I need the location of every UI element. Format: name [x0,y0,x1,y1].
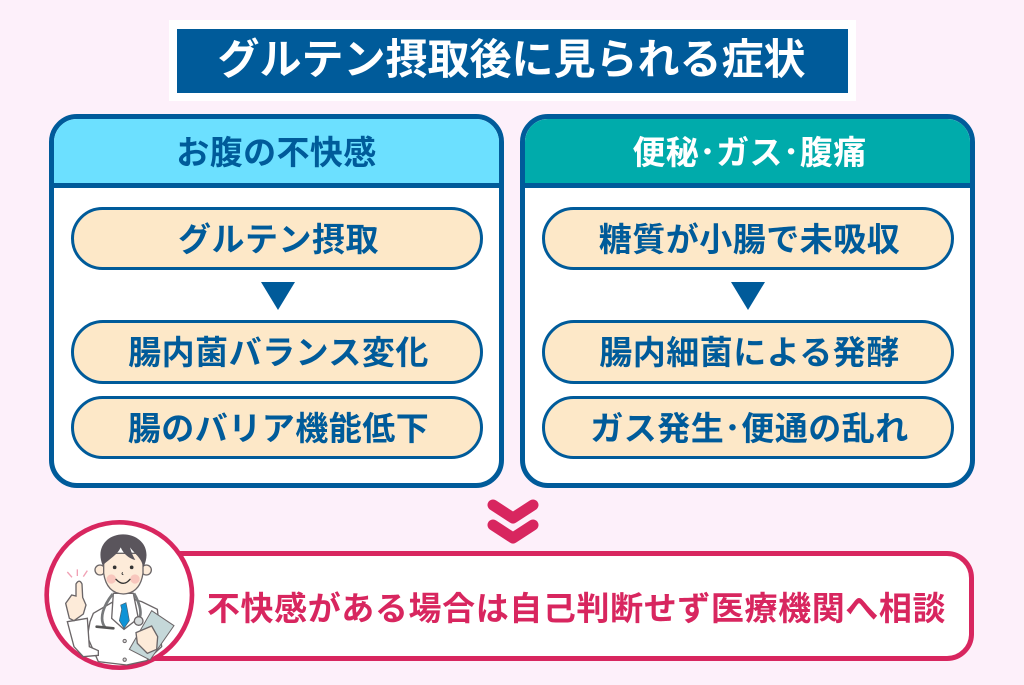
panel heading: stomach discomfort: お腹の不快感 [176,134,377,171]
step: gas and bowel disturbance [542,396,954,459]
callout text: 不快感がある場合は自己判断せず医療機関へ相談 [207,590,946,627]
step: gluten intake: グルテン摂取 [178,221,379,258]
arrow: down left [261,282,295,310]
stethoscope [102,593,140,627]
doctor coat [87,597,162,665]
step: fermentation [542,320,954,384]
arrow: down right [731,282,765,310]
panel: constipation gas pain [520,114,975,488]
step: gluten intake [71,207,483,270]
doctor tie [119,603,129,628]
doctor raised arm [67,618,98,657]
step: gut flora change: 腸内菌バランス変化 [128,334,429,371]
step: barrier decline [71,396,483,459]
doctor neck and collar [112,593,138,629]
panel heading: constipation gas pain: 便秘･ガス･腹痛 [632,134,867,171]
callout box [120,551,974,661]
title [169,20,856,101]
coat buttons [123,639,126,643]
hair [100,534,147,567]
title banner [177,29,848,93]
step: gut flora change [71,320,483,384]
panel heading: constipation gas pain [525,119,970,188]
step: fermentation: 腸内細菌による発酵 [599,334,900,371]
icon: doctor portrait [44,520,194,670]
step: carbohydrate malabsorption: 糖質が小腸で未吸収 [599,221,900,258]
ears [95,565,105,575]
doctor raised hand [66,581,86,621]
step: barrier decline: 腸のバリア機能低下 [128,410,429,447]
title banner: グルテン摂取後に見られる症状 [217,36,806,83]
step: carbohydrate malabsorption [542,207,954,270]
face [104,553,143,594]
arrow: double chevron [488,500,538,544]
hand on clipboard [136,626,158,653]
step: gas and bowel disturbance: ガス発生･便通の乱れ [590,410,909,447]
panel heading: stomach discomfort [54,119,499,188]
panel: stomach discomfort [49,114,504,488]
pointing sparkle [67,569,87,577]
clipboard [129,611,174,660]
eyes and smile [113,566,116,569]
